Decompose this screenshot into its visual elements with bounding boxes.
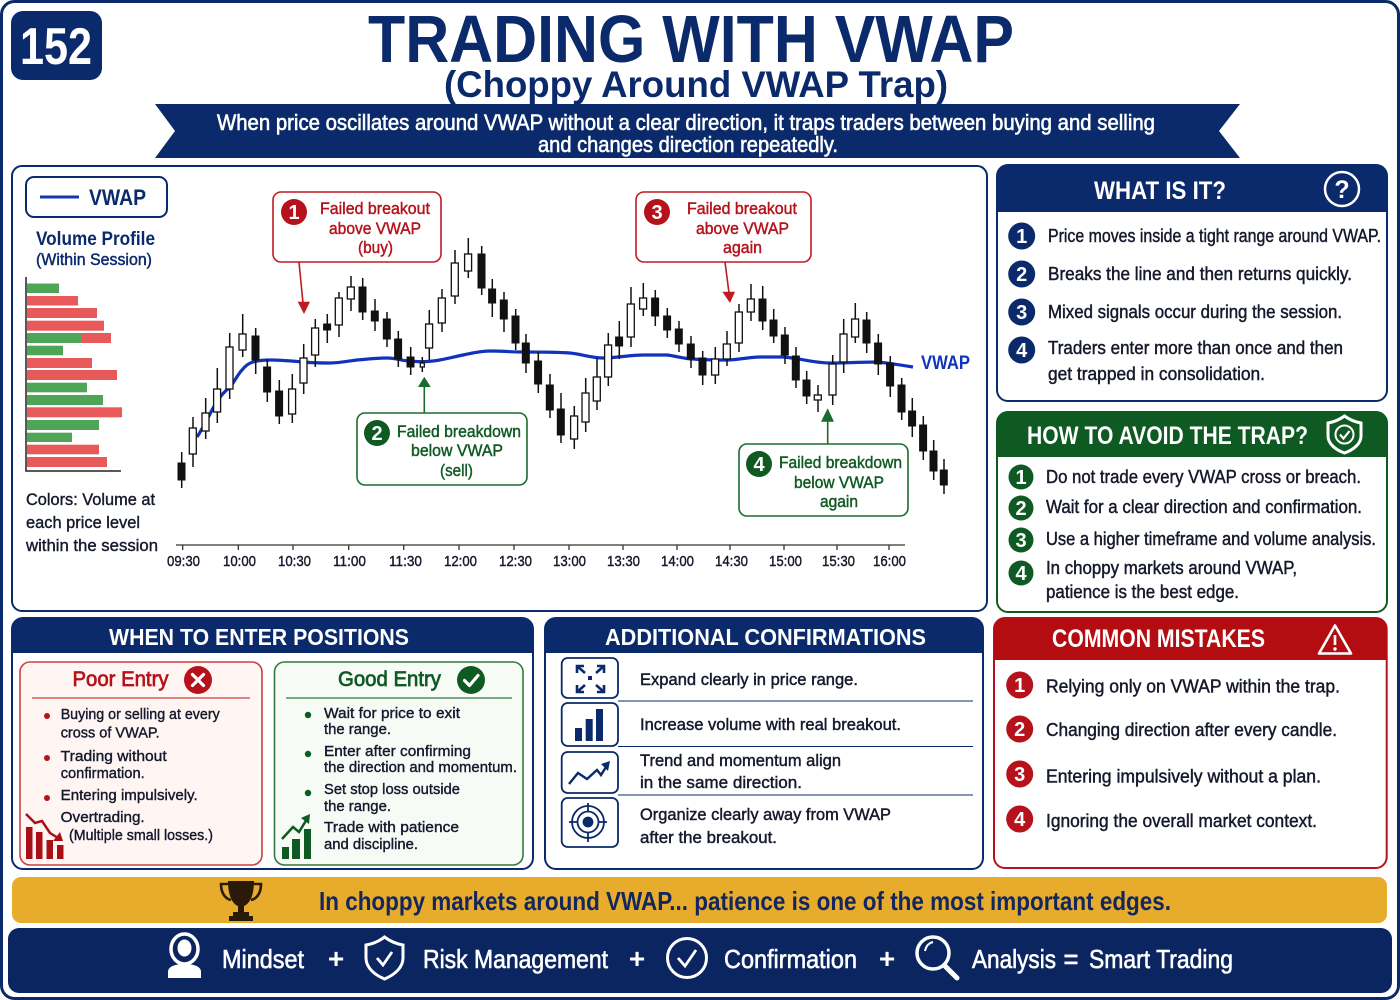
card: good entry: Trade with patience bbox=[324, 819, 459, 836]
header: how to avoid: HOW TO AVOID THE TRAP? bbox=[1027, 422, 1308, 450]
ribbon: summary: and changes direction repeatedly. bbox=[538, 132, 838, 157]
chart: candlesticks bbox=[178, 238, 947, 494]
callout 3: failed breakout again: Failed breakout bbox=[687, 199, 797, 218]
card: poor entry: confirmation. bbox=[61, 765, 145, 782]
callout 4: failed breakdown again: Failed breakdown bbox=[779, 453, 902, 472]
icon: rising bars bbox=[282, 814, 311, 859]
list: common mistakes: 4 bbox=[1014, 809, 1026, 831]
text: confirmation items: Increase volume with real breakout. bbox=[640, 715, 901, 734]
chart: volume profile bars bbox=[26, 277, 122, 471]
chart: time axis: 10:00 bbox=[223, 553, 256, 570]
footer bar: formula: Smart Trading bbox=[1089, 944, 1233, 974]
panel: how to avoid the trap bbox=[997, 412, 1387, 612]
callout 1: failed breakout bbox=[273, 192, 441, 262]
card: poor entry bbox=[20, 662, 262, 865]
heading: volume profile: (Within Session) bbox=[36, 251, 152, 269]
footer bar: formula: Mindset bbox=[222, 944, 305, 974]
card: poor entry: Trading without bbox=[61, 748, 168, 765]
callout 1: failed breakout: above VWAP bbox=[329, 219, 421, 238]
list: what is it: 4 bbox=[1016, 340, 1028, 362]
header: what is it bbox=[997, 165, 1387, 212]
list: common mistakes: Relying only on VWAP within the trap. bbox=[1046, 677, 1340, 697]
list: how to avoid: In choppy markets around VWAP, bbox=[1046, 558, 1297, 578]
icon: volume bars bbox=[562, 703, 618, 746]
arrow: callout 2 bbox=[418, 377, 431, 413]
text: confirmation items: Organize clearly away from VWAP bbox=[640, 805, 891, 824]
list: how to avoid: Wait for a clear direction and confirmation. bbox=[1046, 497, 1362, 517]
chart: time axis: 10:30 bbox=[278, 553, 311, 570]
legend: VWAP bbox=[26, 177, 167, 217]
callout 2: failed breakdown: below VWAP bbox=[411, 441, 503, 460]
chart: time axis: 11:00 bbox=[333, 553, 366, 570]
card: poor entry: Buying or selling at every bbox=[61, 706, 220, 723]
icon: trend arrow bbox=[562, 752, 618, 793]
text: confirmation items bbox=[640, 670, 901, 847]
text: confirmation items: Trend and momentum align bbox=[640, 751, 841, 770]
icon: green check bbox=[457, 666, 485, 694]
card: poor entry: Overtrading. bbox=[61, 809, 145, 826]
chart: time axis: 11:30 bbox=[389, 553, 422, 570]
callout 2: failed breakdown bbox=[357, 413, 527, 485]
callout 3: failed breakout again: 3 bbox=[651, 202, 663, 224]
icon: trophy bbox=[221, 881, 261, 921]
icon: check circle bbox=[668, 938, 706, 978]
card: poor entry: Poor Entry bbox=[72, 668, 169, 691]
header: what is it: ? bbox=[1334, 176, 1350, 204]
list: how to avoid: 4 bbox=[1015, 563, 1027, 585]
card: poor entry: (Multiple small losses.) bbox=[69, 827, 213, 844]
panel: what is it bbox=[997, 165, 1387, 401]
list: common mistakes bbox=[1006, 672, 1340, 832]
heading: volume profile bbox=[36, 229, 155, 269]
text: colors note bbox=[25, 490, 158, 555]
badge: number 152: 152 bbox=[20, 18, 92, 76]
card: good entry: and discipline. bbox=[324, 836, 418, 853]
banner: patience: In choppy markets around VWAP... patience is one of the most important edges. bbox=[319, 886, 1171, 916]
list: what is it: 3 bbox=[1016, 302, 1027, 324]
icon: falling bars bbox=[26, 814, 64, 859]
chart: time axis: 14:00 bbox=[661, 553, 694, 570]
icon: shield bbox=[366, 937, 403, 979]
label: VWAP line: VWAP bbox=[921, 353, 970, 374]
footer bar: formula bbox=[8, 928, 1392, 993]
card: good entry: Good Entry bbox=[338, 668, 441, 691]
text: confirmation items: Expand clearly in price range. bbox=[640, 670, 858, 689]
chart: time axis: 16:00 bbox=[873, 553, 906, 570]
list: what is it bbox=[1008, 222, 1381, 384]
footer bar: formula: + bbox=[328, 943, 344, 974]
callout 1: failed breakout: 1 bbox=[288, 202, 300, 224]
callout 4: failed breakdown again: again bbox=[820, 492, 858, 511]
list: what is it: get trapped in consolidation. bbox=[1048, 364, 1265, 384]
icon: expand bbox=[562, 658, 618, 698]
list: how to avoid: 3 bbox=[1015, 530, 1027, 552]
list: what is it: Breaks the line and then returns quickly. bbox=[1048, 264, 1352, 284]
panel: chart bbox=[12, 166, 987, 611]
arrow: callout 3 bbox=[722, 262, 735, 303]
header: common mistakes: COMMON MISTAKES bbox=[1052, 625, 1265, 653]
footer bar: formula: Risk Management bbox=[423, 944, 609, 974]
card: good entry: Set stop loss outside bbox=[324, 781, 460, 798]
list: how to avoid: Do not trade every VWAP cross or breach. bbox=[1046, 467, 1361, 487]
list: how to avoid: 2 bbox=[1015, 498, 1027, 520]
header: common mistakes bbox=[994, 618, 1387, 660]
text: colors note: within the session bbox=[25, 536, 158, 555]
header: when to enter bbox=[12, 618, 533, 653]
list: what is it: 2 bbox=[1016, 264, 1027, 286]
card: good entry: the range. bbox=[324, 721, 391, 738]
title: TRADING WITH VWAP bbox=[368, 2, 1014, 77]
chart: time axis: 09:30 bbox=[167, 553, 200, 570]
text: confirmation items: after the breakout. bbox=[640, 828, 777, 847]
callout 2: failed breakdown: Failed breakdown bbox=[397, 422, 521, 441]
icon: magnifier bbox=[917, 937, 957, 978]
ribbon: summary bbox=[155, 104, 1240, 158]
callout 4: failed breakdown again: 4 bbox=[753, 454, 765, 476]
chart: time axis: 14:30 bbox=[715, 553, 748, 570]
ribbon: summary: When price oscillates around VWAP without a clear direction, it traps traders between buying and selling bbox=[217, 110, 1155, 135]
card: good entry: the direction and momentum. bbox=[324, 759, 517, 776]
list: how to avoid: 1 bbox=[1015, 467, 1027, 489]
callout 4: failed breakdown again: below VWAP bbox=[794, 473, 884, 492]
header: additional confirmations bbox=[545, 618, 983, 653]
arrow: callout 4 bbox=[821, 408, 834, 444]
banner: patience bbox=[12, 877, 1387, 923]
list: how to avoid: patience is the best edge. bbox=[1046, 582, 1239, 602]
icon: person bbox=[168, 934, 201, 978]
panel: when to enter positions bbox=[12, 618, 533, 869]
list: what is it: 1 bbox=[1016, 226, 1027, 248]
footer bar: formula: = bbox=[1063, 944, 1079, 974]
header: what is it: WHAT IS IT? bbox=[1094, 177, 1226, 205]
chart: time axis: 12:30 bbox=[499, 553, 532, 570]
footer bar: formula: + bbox=[879, 943, 895, 974]
text: confirmation items: in the same direction. bbox=[640, 773, 802, 792]
icon: red cross bbox=[184, 666, 212, 694]
card: good entry bbox=[274, 662, 523, 865]
callout 3: failed breakout again bbox=[636, 192, 811, 262]
list: common mistakes: Changing direction after every candle. bbox=[1046, 720, 1337, 740]
text: colors note: each price level bbox=[26, 513, 140, 532]
chart: time axis: 15:30 bbox=[822, 553, 855, 570]
card: good entry: Wait for price to exit bbox=[324, 705, 461, 722]
list: how to avoid: Use a higher timeframe and volume analysis. bbox=[1046, 529, 1376, 549]
callout 2: failed breakdown: 2 bbox=[371, 423, 383, 445]
chart: time axis: 12:00 bbox=[444, 553, 477, 570]
arrow: callout 1 bbox=[298, 262, 310, 314]
list: common mistakes: 3 bbox=[1014, 764, 1025, 786]
list: what is it: Mixed signals occur during the session. bbox=[1048, 302, 1342, 322]
callout 3: failed breakout again: again bbox=[723, 238, 762, 257]
chart: time axis: 13:30 bbox=[607, 553, 640, 570]
footer bar: formula: Analysis bbox=[972, 944, 1056, 974]
list: common mistakes: Entering impulsively without a plan. bbox=[1046, 767, 1321, 787]
header: additional confirmations: ADDITIONAL CONFIRMATIONS bbox=[605, 624, 926, 650]
footer bar: formula: + bbox=[629, 943, 645, 974]
callout 1: failed breakout: (buy) bbox=[358, 238, 393, 257]
list: common mistakes: 2 bbox=[1014, 719, 1025, 741]
chart: time axis: 15:00 bbox=[769, 553, 802, 570]
legend: VWAP: VWAP bbox=[89, 185, 146, 210]
text: colors note: Colors: Volume at bbox=[26, 490, 155, 509]
list: common mistakes: Ignoring the overall market context. bbox=[1046, 811, 1317, 831]
card: poor entry: cross of VWAP. bbox=[61, 724, 160, 742]
card: good entry: Enter after confirming bbox=[324, 743, 471, 760]
icon: target bbox=[562, 798, 618, 847]
heading: volume profile: Volume Profile bbox=[36, 229, 155, 250]
footer bar: formula: Confirmation bbox=[724, 944, 857, 974]
callout 1: failed breakout: Failed breakout bbox=[320, 199, 430, 218]
list: what is it: Traders enter more than once and then bbox=[1048, 338, 1343, 358]
card: poor entry: Entering impulsively. bbox=[61, 787, 198, 804]
header: when to enter: WHEN TO ENTER POSITIONS bbox=[109, 624, 409, 650]
callout 3: failed breakout again: above VWAP bbox=[696, 219, 789, 238]
list: how to avoid bbox=[1008, 464, 1376, 602]
callout 2: failed breakdown: (sell) bbox=[440, 461, 473, 480]
callout 4: failed breakdown again bbox=[739, 444, 908, 516]
header: how to avoid bbox=[997, 412, 1387, 457]
subtitle: (Choppy Around VWAP Trap) bbox=[444, 64, 948, 105]
chart: time axis: 13:00 bbox=[553, 553, 586, 570]
panel: common mistakes bbox=[994, 618, 1387, 868]
card: good entry: the range. bbox=[324, 798, 391, 815]
panel: additional confirmations bbox=[545, 618, 983, 869]
chart: time axis bbox=[167, 545, 906, 570]
list: common mistakes: 1 bbox=[1014, 675, 1025, 697]
line: VWAP curve bbox=[197, 351, 913, 437]
